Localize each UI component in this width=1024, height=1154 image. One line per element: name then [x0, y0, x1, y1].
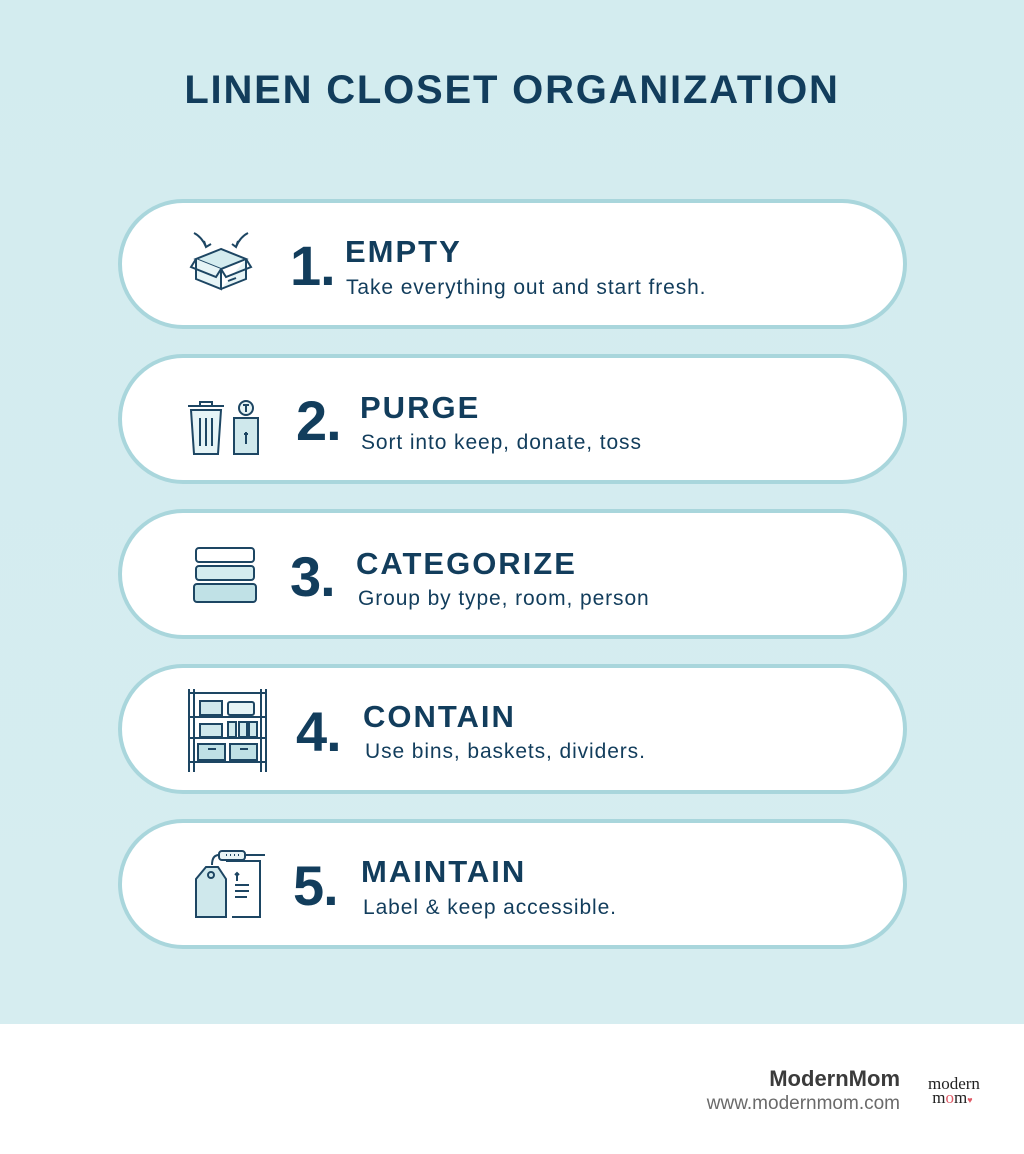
panel: step 4 contain	[118, 664, 907, 794]
panel: step 1 empty	[118, 199, 907, 329]
icon: trash and box	[188, 400, 259, 455]
text: Sort into keep, donate, toss	[361, 431, 642, 454]
icon: tag and checklist	[195, 850, 265, 918]
panel: step 3 categorize	[118, 509, 907, 639]
number 1: 1.	[290, 234, 335, 297]
number 5: 5.	[293, 854, 338, 917]
icon: open box	[190, 232, 252, 290]
panel: step 2 purge	[118, 354, 907, 484]
heading: empty: EMPTY	[345, 234, 462, 269]
icon: stacked linens	[193, 547, 257, 603]
text: Use bins, baskets, dividers.	[365, 740, 646, 763]
footer logo	[928, 1074, 980, 1107]
footer brand text: www.modernmom.com	[707, 1093, 900, 1114]
heading: purge: PURGE	[360, 390, 480, 425]
number 3: 3.	[290, 545, 335, 608]
panel: step 5 maintain	[118, 819, 907, 949]
text: Group by type, room, person	[358, 587, 650, 610]
heading: categorize: CATEGORIZE	[356, 546, 577, 581]
number 4: 4.	[296, 700, 341, 763]
text: Take everything out and start fresh.	[346, 276, 706, 299]
heading: maintain: MAINTAIN	[361, 854, 526, 889]
title: LINEN CLOSET ORGANIZATION	[184, 68, 840, 112]
number 2: 2.	[296, 389, 341, 452]
heading: contain: CONTAIN	[363, 699, 516, 734]
footer logo: modern	[928, 1074, 980, 1093]
icon: shelf with bins	[188, 689, 267, 772]
footer logo: mom♥	[932, 1088, 973, 1107]
footer brand text: ModernMom	[769, 1066, 900, 1091]
text: Label & keep accessible.	[363, 896, 617, 919]
footer brand text	[706, 1066, 900, 1114]
